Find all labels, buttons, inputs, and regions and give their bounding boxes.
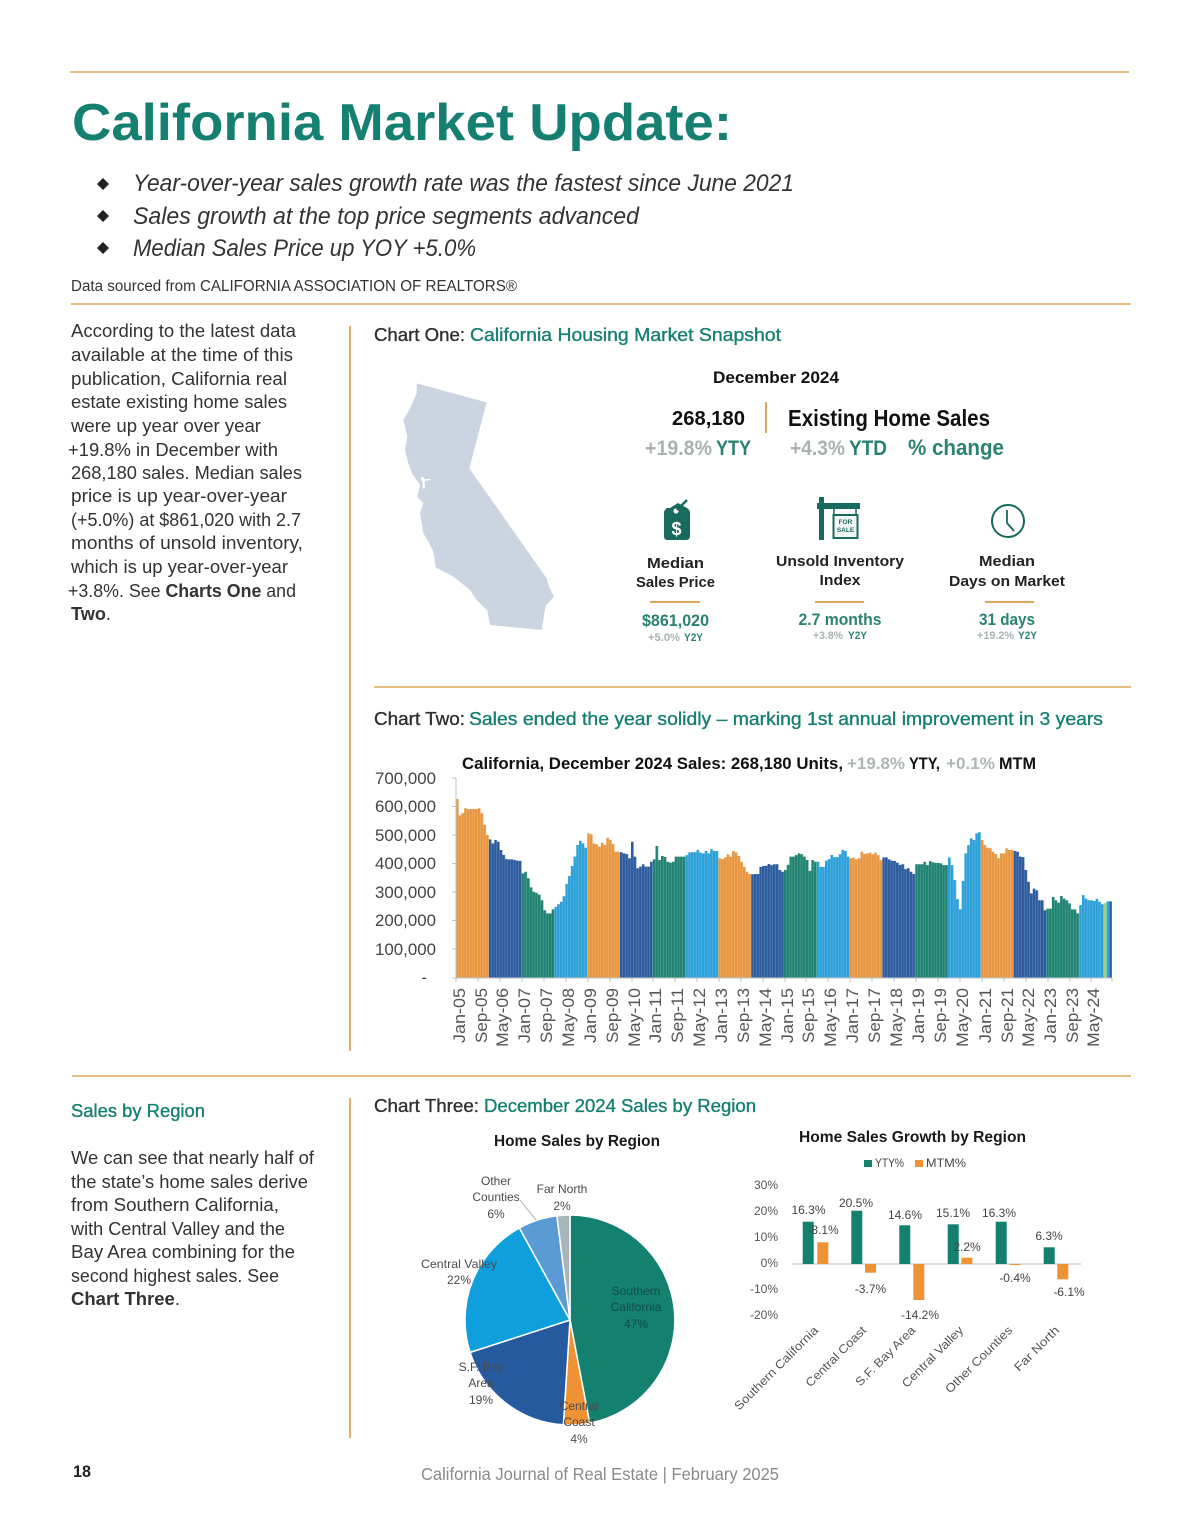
bar chart: home sales growth by region <box>731 1129 1085 1413</box>
panel: monthly sales chart <box>375 755 1112 1047</box>
regional text block: Chart Three. <box>71 1289 180 1309</box>
pie labels: Central <box>560 1399 598 1413</box>
x axis labels: Sep-07 <box>537 988 556 1043</box>
pie labels: Area <box>468 1376 494 1390</box>
pie labels: 4% <box>570 1432 588 1446</box>
y axis labels: 20% <box>754 1204 778 1218</box>
icon: price tag: $ <box>671 519 682 539</box>
intro text block: 268,180 sales. Median sales <box>71 463 302 483</box>
x axis labels: May-24 <box>1084 988 1103 1047</box>
value labels: 8.1% <box>811 1223 839 1237</box>
intro text block: which is up year-over-year <box>70 557 288 577</box>
x axis labels: Sep-15 <box>799 988 818 1043</box>
bar chart title: Home Sales Growth by Region <box>799 1129 1026 1146</box>
title: California Market Update: <box>72 94 732 152</box>
legend: MTM% <box>926 1156 966 1170</box>
pie labels: 19% <box>469 1393 493 1407</box>
YTY bars <box>803 1211 1055 1264</box>
intro text block: available at the time of this <box>71 345 293 365</box>
panel: housing market snapshot <box>403 368 1065 644</box>
x axis labels: May-06 <box>493 988 512 1047</box>
existing home sales: +4.3% <box>790 437 845 460</box>
existing home sales: YTD <box>849 437 887 460</box>
regional text block <box>70 1148 315 1309</box>
icon: for sale sign <box>817 497 860 540</box>
metric: median days on market: Y2Y <box>1018 630 1038 642</box>
value labels: -6.1% <box>1053 1285 1085 1299</box>
existing home sales: +19.8% <box>645 437 712 460</box>
pie labels: Southern <box>612 1284 660 1298</box>
metric: median days on market: Days on Market <box>949 573 1065 590</box>
regional text block: second highest sales. See <box>71 1266 279 1286</box>
key points list: Sales growth at the top price segments advanced <box>133 203 640 230</box>
chart title <box>462 755 1036 773</box>
metric: median sales price: $861,020 <box>642 611 709 630</box>
x axis labels: May-22 <box>1019 988 1038 1047</box>
existing home sales: YTY <box>716 437 751 460</box>
legend: YTY% <box>875 1156 904 1170</box>
chart title: California, December 2024 Sales: 268,180 Units, <box>462 755 843 773</box>
metric: median days on market <box>949 553 1065 642</box>
metric: unsold inventory index: Unsold Inventory <box>776 553 905 570</box>
x axis labels: Jan-15 <box>778 988 797 1043</box>
intro text block: According to the latest data <box>71 321 297 341</box>
regional text block: Bay Area combining for the <box>71 1242 295 1262</box>
x axis labels: Jan-23 <box>1041 988 1060 1043</box>
x axis labels: Jan-17 <box>843 988 862 1043</box>
regional text block: from Southern California, <box>71 1195 279 1215</box>
key points list <box>97 170 794 262</box>
y axis labels: 700,000 <box>375 770 436 788</box>
regional text block: with Central Valley and the <box>70 1219 285 1239</box>
icon: for sale sign: SALE <box>837 527 855 534</box>
y axis labels: -10% <box>750 1282 778 1296</box>
x axis labels: Jan-21 <box>976 988 995 1043</box>
x axis labels: Jan-19 <box>909 988 928 1043</box>
value labels: -0.4% <box>999 1271 1031 1285</box>
y axis labels: 0% <box>761 1256 778 1270</box>
metric: median sales price: Y2Y <box>684 632 704 644</box>
pie labels: 47% <box>624 1317 648 1331</box>
heading: chart three: December 2024 Sales by Region <box>484 1096 756 1116</box>
y axis labels: 200,000 <box>375 912 436 930</box>
page number: 18 <box>73 1463 91 1481</box>
y axis labels: 300,000 <box>375 884 436 902</box>
category labels <box>731 1323 1062 1413</box>
metric: median days on market: +19.2% <box>977 630 1014 642</box>
x axis labels: Jan-13 <box>712 988 731 1043</box>
intro text block: publication, California real <box>71 369 287 389</box>
pie labels: 6% <box>487 1207 505 1221</box>
x axis labels: Sep-09 <box>603 988 622 1043</box>
value labels: 2.2% <box>953 1240 981 1254</box>
icon: clock <box>992 505 1024 537</box>
y axis labels: 10% <box>754 1230 778 1244</box>
regional text block: We can see that nearly half of <box>71 1148 315 1168</box>
pie labels: Far North <box>537 1182 587 1196</box>
x axis labels <box>450 988 1103 1047</box>
x axis labels: May-12 <box>690 988 709 1047</box>
x axis labels: May-16 <box>821 988 840 1047</box>
intro text block: price is up year-over-year <box>71 486 287 506</box>
existing home sales: % change <box>908 435 1004 460</box>
x axis labels: May-10 <box>625 988 644 1047</box>
y axis labels: 400,000 <box>375 855 436 873</box>
existing home sales: 268,180 <box>672 408 745 430</box>
intro text block: +19.8% in December with <box>68 440 278 460</box>
metric: unsold inventory index <box>776 553 905 642</box>
intro text block <box>68 321 303 624</box>
intro text block: months of unsold inventory, <box>71 533 303 553</box>
existing home sales: Existing Home Sales <box>788 405 990 431</box>
metric: median sales price: Sales Price <box>636 574 715 591</box>
pie labels: 2% <box>553 1199 571 1213</box>
heading: chart two: Chart Two: <box>374 709 465 729</box>
value labels: 20.5% <box>839 1196 873 1210</box>
heading: sales by region: Sales by Region <box>71 1101 205 1121</box>
existing home sales <box>645 402 1004 460</box>
heading: chart one: Chart One: <box>374 325 465 345</box>
pie title: Home Sales by Region <box>494 1133 660 1150</box>
map of California <box>403 384 554 630</box>
chart title: YTY, <box>909 755 940 773</box>
snapshot date: December 2024 <box>713 368 840 387</box>
category labels: Central Coast <box>803 1323 870 1390</box>
value labels: 6.3% <box>1035 1229 1063 1243</box>
y axis labels: 100,000 <box>375 941 436 959</box>
pie labels: Coast <box>563 1415 595 1429</box>
category labels: Southern California <box>731 1323 821 1413</box>
heading: chart three: Chart Three: <box>374 1096 479 1116</box>
category labels: Central Valley <box>899 1323 966 1390</box>
icon: for sale sign: FOR <box>839 519 853 526</box>
x axis labels: Jan-05 <box>450 988 469 1043</box>
value labels: -14.2% <box>901 1308 939 1322</box>
intro text block: +3.8%. See Charts One and <box>68 581 296 601</box>
x axis labels: Sep-13 <box>734 988 753 1043</box>
source note: Data sourced from CALIFORNIA ASSOCIATION OF REALTORS® <box>71 278 518 295</box>
pie labels: 22% <box>447 1273 471 1287</box>
intro text block: Two. <box>71 604 111 624</box>
pie chart: home sales by region <box>421 1133 675 1446</box>
chart title: +0.1% <box>946 755 995 773</box>
intro text block: (+5.0%) at $861,020 with 2.7 <box>71 510 301 530</box>
category labels: Other Counties <box>942 1323 1015 1396</box>
key points list: Median Sales Price up YOY +5.0% <box>133 235 476 262</box>
heading: chart one: California Housing Market Snapshot <box>470 325 781 345</box>
x axis labels: May-14 <box>756 988 775 1047</box>
pie labels: Other <box>481 1174 511 1188</box>
y axis labels: 500,000 <box>375 827 436 845</box>
x axis labels: Sep-17 <box>865 988 884 1043</box>
y axis labels: 30% <box>754 1178 778 1192</box>
value labels: 16.3% <box>982 1206 1016 1220</box>
pie slices <box>465 1215 675 1425</box>
intro text block: estate existing home sales <box>71 392 287 412</box>
legend <box>864 1156 966 1170</box>
category labels: S.F. Bay Area <box>852 1323 918 1389</box>
pie labels: S.F. Bay <box>459 1360 503 1374</box>
metric: unsold inventory index: Index <box>820 572 861 589</box>
value labels: 15.1% <box>936 1206 970 1220</box>
y axis labels: 600,000 <box>375 798 436 816</box>
x axis labels: Sep-21 <box>998 988 1017 1043</box>
metric: median days on market: 31 days <box>979 610 1035 629</box>
x axis labels: Jan-07 <box>515 988 534 1043</box>
MTM bars <box>817 1242 1068 1300</box>
value labels: 16.3% <box>791 1203 826 1217</box>
footer: California Journal of Real Estate | February 2025 <box>421 1464 779 1484</box>
regional text block: the state’s home sales derive <box>71 1172 308 1192</box>
x axis labels: May-08 <box>559 988 578 1047</box>
y axis labels: - <box>422 969 427 987</box>
pie labels: Central Valley <box>421 1257 497 1271</box>
icon: price tag <box>664 500 690 540</box>
metric: unsold inventory index: Y2Y <box>848 630 868 642</box>
x axis labels: Jan-09 <box>581 988 600 1043</box>
value labels <box>791 1196 1085 1322</box>
metric: median sales price <box>636 555 715 644</box>
x axis labels: Sep-11 <box>668 988 687 1043</box>
x axis labels: May-18 <box>887 988 906 1047</box>
category labels: Far North <box>1011 1323 1062 1374</box>
heading: chart two: Sales ended the year solidly – marking 1st annual improvement in 3 years <box>469 709 1103 729</box>
x axis labels: Sep-19 <box>931 988 950 1043</box>
key points list: Year-over-year sales growth rate was the fastest since June 2021 <box>133 170 794 197</box>
x axis labels: Sep-23 <box>1063 988 1082 1043</box>
chart title: +19.8% <box>847 755 905 773</box>
y axis labels: -20% <box>750 1308 778 1322</box>
heading: chart three <box>374 1096 756 1116</box>
bars <box>456 798 1112 978</box>
metric: median sales price: +5.0% <box>648 632 680 644</box>
chart title: MTM <box>999 755 1036 773</box>
y axis labels <box>750 1178 778 1322</box>
x axis labels: Jan-11 <box>646 988 665 1043</box>
metric: unsold inventory index: +3.8% <box>813 630 843 642</box>
value labels: 14.6% <box>888 1208 922 1222</box>
metric: median sales price: Median <box>647 555 704 572</box>
pie labels <box>421 1174 662 1446</box>
metric: median days on market: Median <box>979 553 1035 570</box>
value labels: -3.7% <box>855 1282 886 1296</box>
intro text block: were up year over year <box>70 416 261 436</box>
pie labels: California <box>611 1300 662 1314</box>
y axis labels <box>375 770 436 987</box>
x axis labels: Sep-05 <box>472 988 491 1043</box>
pie labels: Counties <box>472 1190 520 1204</box>
metric: unsold inventory index: 2.7 months <box>798 610 882 629</box>
x axis labels: May-20 <box>953 988 972 1047</box>
